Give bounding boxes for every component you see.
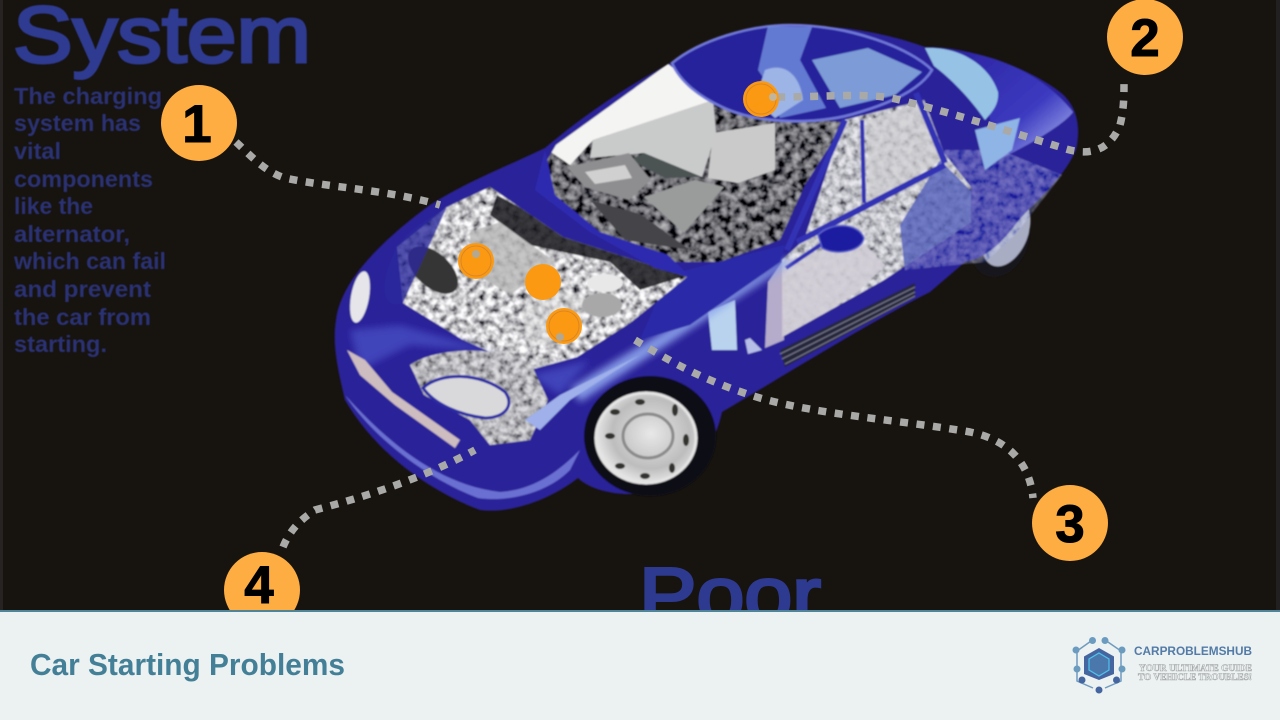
window pillars: [786, 93, 945, 268]
car body: [335, 26, 1078, 511]
heading: Poor: Poor: [639, 553, 821, 638]
front wheel: [584, 376, 716, 496]
dotted leader lines: [236, 80, 1124, 547]
marker: engine point two: [525, 264, 561, 300]
cutaway car illustration: [335, 25, 1078, 511]
side interior: [781, 99, 972, 337]
logo tagline: TO VEHICLE TROUBLES!: [1138, 673, 1252, 683]
grille and lower radiator: [405, 345, 550, 445]
badge 4: 4: [244, 556, 274, 615]
text block: charging system: alternator,: [14, 221, 130, 247]
hood blue trim: [350, 150, 690, 395]
door panel highlights: [570, 245, 792, 402]
badge 2: [1107, 0, 1183, 75]
text block: charging system: [13, 83, 166, 357]
leader 2: [777, 80, 1124, 152]
text block: charging system: the car from: [14, 304, 151, 330]
side mirror: [818, 226, 864, 252]
rear quarter wire detail: [900, 118, 1070, 275]
text block: charging system: system has: [14, 110, 141, 136]
leader 3: [635, 340, 1033, 498]
logo tagline: [1138, 664, 1252, 683]
footer title: Car Starting Problems: [30, 647, 345, 682]
marker: engine point one: [458, 243, 494, 279]
text block: charging system: vital: [14, 138, 61, 164]
logo icon: hexagon network: [1072, 637, 1126, 694]
marker: roof point: [743, 81, 779, 117]
leader 1: [236, 142, 440, 205]
fender highlight: [525, 355, 640, 430]
text block: charging system: which can fail: [13, 248, 166, 274]
callout points on car: [458, 81, 779, 344]
front bumper highlight: [345, 395, 580, 499]
rear wheel: [960, 190, 1040, 286]
text block: charging system: The charging: [14, 83, 162, 109]
badge 4: [224, 552, 300, 610]
text block: charging system: starting.: [14, 331, 107, 357]
logo tagline: YOUR ULTIMATE GUIDE: [1139, 664, 1252, 674]
badge 1: [161, 85, 237, 161]
side sill vent: [780, 283, 915, 367]
text block: charging system: and prevent: [14, 276, 151, 302]
badge 2: 2: [1130, 9, 1160, 68]
engine bay: [390, 180, 695, 375]
footer bar: [0, 610, 1280, 720]
cabin interior: [546, 63, 842, 264]
logo name: CARPROBLEMSHUB: [1134, 646, 1252, 658]
badge 1: 1: [182, 95, 212, 154]
text block: charging system: components: [14, 166, 153, 192]
leader 4: [283, 450, 475, 547]
left headlamp: [347, 270, 373, 324]
badge 3: 3: [1055, 495, 1085, 554]
badge 3: [1032, 485, 1108, 561]
marker: engine point three: [546, 308, 582, 344]
text block: charging system: like the: [14, 193, 93, 219]
pink bumper strip: [347, 350, 460, 448]
rear deck highlight: [940, 50, 1073, 165]
rear window: [925, 48, 998, 120]
logo: [1072, 637, 1252, 694]
roof glass: [672, 25, 932, 121]
